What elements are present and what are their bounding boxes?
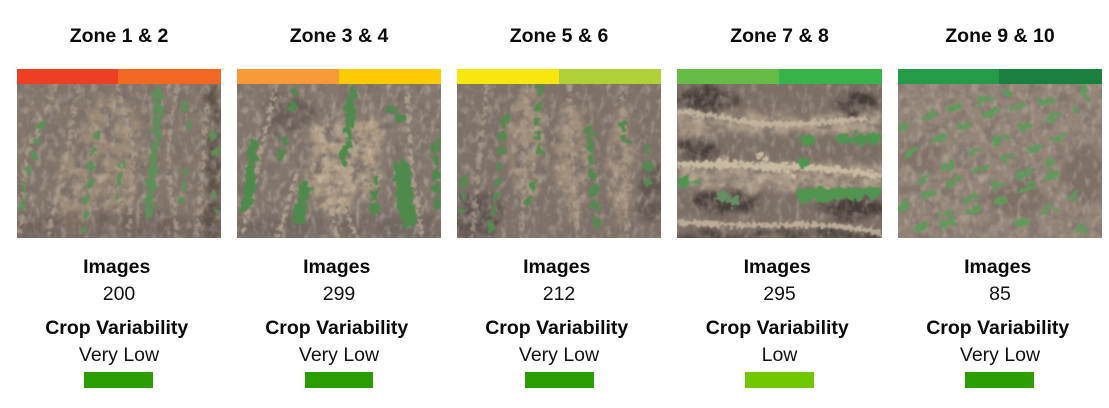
- heading: zone 1 & 2: Zone 1 & 2: [70, 25, 168, 47]
- photo: crop rows zone 7 & 8: [677, 84, 882, 238]
- colour bar: zone 1 & 2: [17, 69, 221, 84]
- heading: zone 3 & 4: Zone 3 & 4: [290, 25, 388, 47]
- value: very low: Very Low: [79, 344, 159, 366]
- colour bar: zone 9 & 10: [898, 69, 1102, 84]
- colour bar: zone 7 & 8: [677, 69, 882, 84]
- label: crop variability: Crop Variability: [45, 317, 188, 339]
- panel: zone 5 & 6: [457, 25, 661, 388]
- indicator: very low: [84, 372, 153, 388]
- panel: zone 9 & 10: [898, 25, 1102, 388]
- heading: zone 9 & 10: Zone 9 & 10: [945, 25, 1055, 47]
- photo: crop rows zone 9 & 10: [898, 84, 1102, 238]
- indicator: very low: [965, 372, 1034, 388]
- label: crop variability: Crop Variability: [265, 317, 408, 339]
- value: very low: Very Low: [299, 344, 379, 366]
- photo: crop rows zone 5 & 6: [457, 84, 661, 238]
- value: very low: Very Low: [519, 344, 599, 366]
- label: crop variability: Crop Variability: [485, 317, 628, 339]
- indicator: very low: [305, 372, 373, 388]
- label: images: Images: [303, 256, 370, 278]
- indicator: very low: [525, 372, 594, 388]
- heading: zone 5 & 6: Zone 5 & 6: [510, 25, 608, 47]
- label: images: Images: [523, 256, 590, 278]
- value: images 85: 85: [989, 283, 1011, 305]
- photo: crop rows zone 1 & 2: [17, 84, 221, 238]
- label: crop variability: Crop Variability: [926, 317, 1069, 339]
- indicator: low: [745, 372, 814, 388]
- label: images: Images: [744, 256, 811, 278]
- value: low: Low: [762, 344, 797, 366]
- label: crop variability: Crop Variability: [706, 317, 849, 339]
- value: images 212: 212: [543, 283, 575, 305]
- value: images 200: 200: [103, 283, 135, 305]
- colour bar: zone 3 & 4: [237, 69, 441, 84]
- heading: zone 7 & 8: Zone 7 & 8: [730, 25, 829, 47]
- value: very low: Very Low: [960, 344, 1040, 366]
- label: images: Images: [964, 256, 1031, 278]
- panel: zone 7 & 8: [677, 25, 882, 388]
- value: images 299: 299: [323, 283, 355, 305]
- value: images 295: 295: [763, 283, 796, 305]
- panel: zone 1 & 2: [17, 25, 221, 388]
- photo: crop rows zone 3 & 4: [237, 84, 441, 238]
- colour bar: zone 5 & 6: [457, 69, 661, 84]
- label: images: Images: [83, 256, 150, 278]
- panel: zone 3 & 4: [237, 25, 441, 388]
